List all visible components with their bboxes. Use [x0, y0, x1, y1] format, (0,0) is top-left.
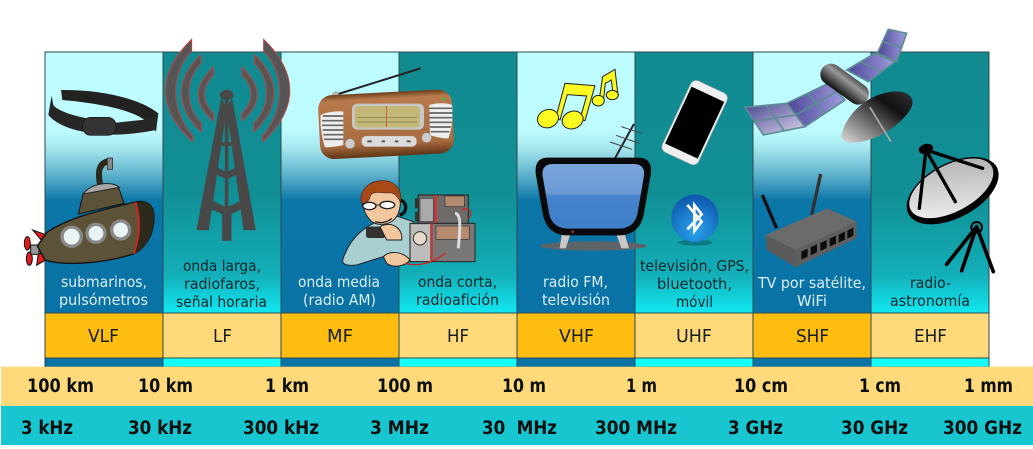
- icon: bluetooth: [671, 195, 719, 246]
- icon: smartphone: [660, 79, 729, 167]
- frequency scale band: 3 MHz: [370, 418, 429, 439]
- strip: colour bottom band: [45, 358, 989, 367]
- frequency scale band: 300 kHz: [243, 418, 319, 439]
- band name row: EHF: [914, 326, 947, 347]
- band name row: VLF: [88, 326, 119, 347]
- frequency scale band: 300 MHz: [595, 418, 677, 439]
- frequency scale band: 300 GHz: [943, 418, 1022, 439]
- text: LF uses: señal horaria: [176, 293, 267, 311]
- text: VLF uses: submarinos,: [61, 273, 147, 291]
- band name row: MF: [327, 326, 353, 347]
- frequency scale band: 30 kHz: [128, 418, 192, 439]
- text: EHF uses: astronomía: [890, 292, 970, 310]
- frequency scale band: 3 GHz: [728, 418, 783, 439]
- band name row: SHF: [796, 326, 829, 347]
- icon: wifi router: [762, 174, 857, 267]
- icon: television: [536, 124, 651, 251]
- text: EHF uses: radio-: [910, 274, 951, 292]
- frequency scale band: 30 GHz: [841, 418, 908, 439]
- icon: heart rate chest strap: [48, 90, 158, 135]
- wavelength scale band: 1 km: [265, 376, 309, 397]
- icon: satellite: [745, 29, 913, 143]
- text: SHF uses: TV por satélite,: [757, 274, 866, 292]
- wavelength scale band: 1 mm: [964, 376, 1013, 397]
- text: HF uses: [416, 273, 499, 309]
- panel: frequency columns: [45, 52, 989, 313]
- text: VHF uses: televisión: [542, 291, 610, 309]
- text: VHF uses: [542, 273, 610, 309]
- frequency scale band: [1, 406, 1033, 445]
- icon: radio transceiver equipment: [405, 195, 475, 265]
- band name row: [45, 313, 989, 358]
- text: SHF uses: WiFi: [797, 292, 827, 310]
- text: UHF uses: móvil: [676, 293, 713, 311]
- band name row: LF: [213, 326, 232, 347]
- icon: submarine: [24, 158, 154, 265]
- wavelength scale band: 1 cm: [859, 376, 901, 397]
- wavelength scale band: 100 m: [377, 376, 433, 397]
- text: HF uses: radioafición: [416, 291, 499, 309]
- frequency scale band: 30 MHz: [482, 418, 557, 439]
- text: UHF uses: [640, 257, 749, 311]
- band name row: VHF: [559, 326, 594, 347]
- icon: radio tower with waves: [166, 39, 290, 241]
- frequency scale band: 3 kHz: [21, 418, 73, 439]
- text: UHF uses: bluetooth,: [657, 275, 732, 293]
- wavelength scale band: [1, 367, 1033, 406]
- icon: retro radio: [317, 68, 455, 160]
- wavelength scale band: 10 m: [502, 376, 546, 397]
- text: VLF uses: [59, 273, 148, 309]
- icon: radio amateur operator: [343, 181, 413, 266]
- band name row: HF: [447, 326, 469, 347]
- text: LF uses: [176, 257, 267, 311]
- text: SHF uses: [757, 274, 866, 310]
- text: MF uses: (radio AM): [303, 291, 376, 309]
- text: EHF uses: [890, 274, 970, 310]
- wavelength scale band: 10 cm: [734, 376, 788, 397]
- text: MF uses: [298, 273, 380, 309]
- text: VHF uses: radio FM,: [543, 273, 608, 291]
- wavelength scale band: 1 m: [626, 376, 657, 397]
- text: LF uses: radiofaros,: [184, 275, 260, 293]
- icon: music notes: [535, 69, 618, 132]
- band name row: UHF: [676, 326, 712, 347]
- text: LF uses: onda larga,: [183, 257, 261, 275]
- text: VLF uses: pulsómetros: [59, 291, 148, 309]
- wavelength scale band: 100 km: [27, 376, 94, 397]
- text: UHF uses: televisión, GPS,: [640, 257, 749, 275]
- text: HF uses: onda corta,: [418, 273, 497, 291]
- text: MF uses: onda media: [298, 273, 380, 291]
- wavelength scale band: 10 km: [138, 376, 193, 397]
- icon: parabolic dish: [896, 142, 1010, 272]
